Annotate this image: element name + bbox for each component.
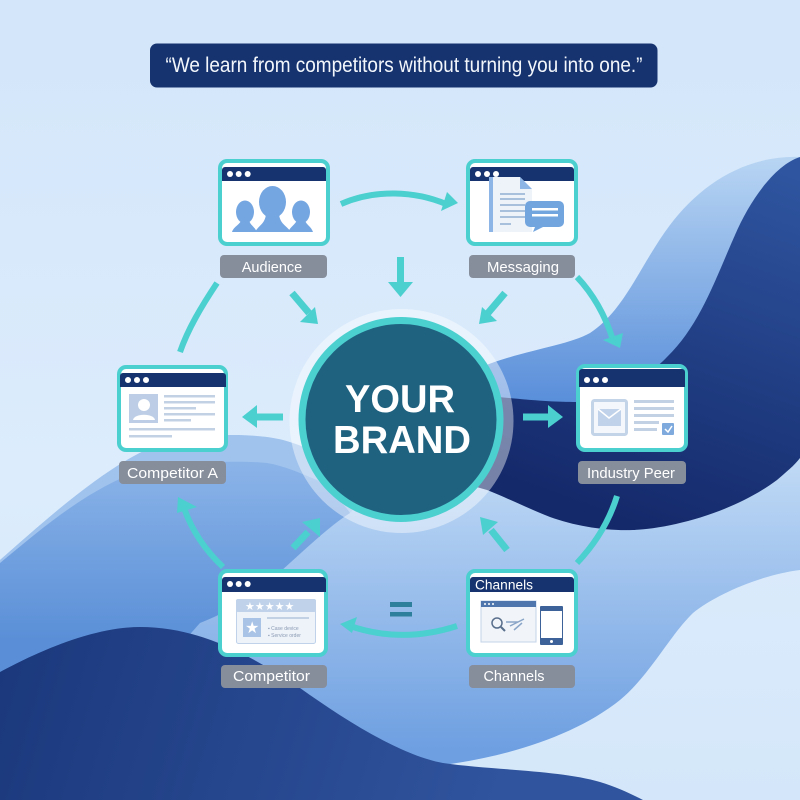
arrow: audience to brand	[292, 293, 318, 324]
wave: left outer strip	[0, 435, 380, 680]
arrow: industry peer to channels	[577, 496, 617, 563]
arrow: to competitor A	[242, 405, 283, 428]
card: Channels	[468, 571, 576, 655]
card: Competitor A	[119, 367, 226, 450]
label: Competitor A: Competitor A	[127, 466, 218, 482]
card: Messaging	[468, 161, 576, 244]
central brand circle	[290, 309, 514, 533]
icon: email and check	[592, 400, 674, 435]
card: Industry Peer	[578, 366, 686, 450]
headline banner: “We learn from competitors without turning you into one.”	[166, 54, 643, 77]
icon: people	[232, 186, 313, 232]
icon: browser search and phone	[481, 601, 563, 645]
headline banner	[150, 44, 658, 88]
icon: review card	[236, 599, 316, 644]
card: Competitor	[220, 571, 326, 655]
label: Competitor: Competitor	[233, 669, 310, 685]
arrow: top	[388, 257, 413, 297]
arrow: competitor to brand	[293, 518, 320, 548]
arrow: competitor to competitor A	[177, 497, 223, 567]
central brand circle: BRAND	[333, 419, 471, 462]
wave: upper right navy	[430, 157, 800, 530]
label: Messaging: Messaging	[487, 260, 559, 276]
label: Audience: Audience	[242, 260, 302, 276]
arrow: messaging to industry peer	[577, 277, 623, 348]
icon: document and speech bubble	[489, 177, 564, 232]
label: Channels: Channels	[484, 669, 544, 685]
arrow: messaging to brand	[479, 293, 505, 324]
card: Channels: Channels	[475, 578, 533, 592]
arrow: audience to messaging	[341, 192, 458, 211]
arrow: channels to competitor	[340, 617, 457, 635]
card: Audience	[220, 161, 328, 244]
label: Competitor A	[119, 461, 226, 484]
wave: upper right band	[440, 157, 800, 420]
central brand circle: YOUR	[345, 378, 455, 421]
wave: left inner blue	[0, 462, 350, 680]
label: Industry Peer	[578, 461, 686, 484]
inward and outward arrows	[242, 257, 563, 550]
arrow: competitor A to audience	[180, 283, 217, 352]
icon: review card: ★	[245, 618, 259, 637]
label: Competitor	[221, 665, 327, 688]
equals sign	[390, 602, 412, 616]
cycle arrows	[177, 192, 623, 635]
icon: review card: ★★★★★	[245, 600, 294, 613]
icon: review card: ▪ Service order	[268, 633, 301, 639]
arrow: to industry peer	[523, 405, 563, 428]
label: Industry Peer: Industry Peer	[587, 466, 675, 482]
label: Audience	[220, 255, 327, 278]
wave: bottom left navy	[0, 627, 643, 800]
label: Channels	[469, 665, 575, 688]
arrow: channels to brand	[480, 517, 507, 550]
label: Messaging	[469, 255, 575, 278]
wave: lower main blue	[0, 435, 800, 800]
icon: profile	[129, 394, 215, 438]
icon: review card: ▪ Case device	[268, 626, 299, 632]
